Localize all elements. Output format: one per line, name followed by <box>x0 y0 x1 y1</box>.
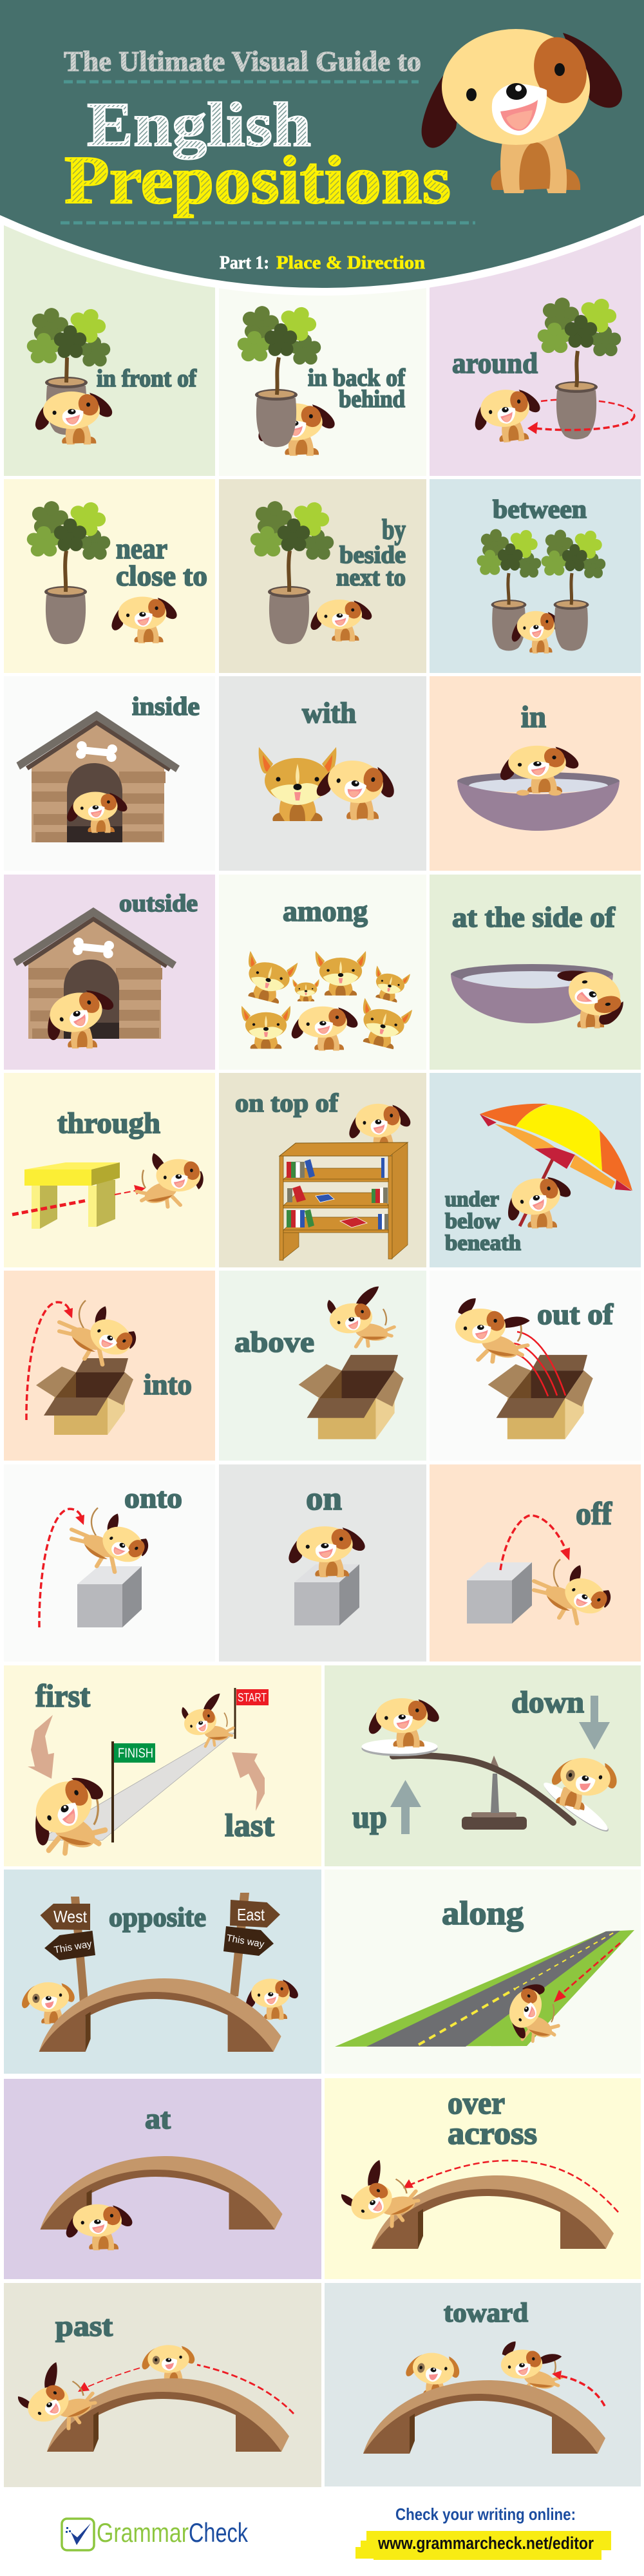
panel: with <box>219 676 426 871</box>
label: opposite: opposite <box>109 1903 206 1933</box>
label: up: up <box>352 1799 387 1835</box>
arrow: jump off cube <box>500 1515 570 1570</box>
icon: running dog <box>498 2334 565 2396</box>
label: outside: outside <box>119 890 198 917</box>
icon: dog leaping out <box>455 1294 531 1363</box>
label: between: between <box>493 495 587 524</box>
icon: dog going up <box>369 1698 439 1748</box>
icon: last dog <box>176 1688 236 1752</box>
panel: past <box>4 2283 321 2487</box>
label: above: above <box>234 1325 314 1358</box>
icon: bridge <box>363 2380 605 2454</box>
label: over: over <box>448 2085 505 2121</box>
icon: start flag: START <box>238 1691 267 1704</box>
label: close to: close to <box>116 560 207 592</box>
arrow: around tree <box>527 415 634 434</box>
panel: into <box>4 1271 215 1461</box>
icon: west signpost <box>40 1897 95 2003</box>
panel: in back of / behind <box>219 219 426 476</box>
arrow: through the table <box>12 1185 146 1215</box>
subtitle: part 1 <box>220 252 425 273</box>
icon: dog above box <box>321 1280 397 1352</box>
label: past: past <box>55 2309 113 2342</box>
panel: toward <box>325 2283 641 2486</box>
panel: at the side of <box>430 875 641 1070</box>
icon: dog going down <box>550 1752 621 1812</box>
icon: dog <box>316 753 400 820</box>
label: off: off <box>576 1495 612 1531</box>
icon: bowl <box>451 964 613 1023</box>
icon: sitting dog <box>404 2349 462 2396</box>
panel: around <box>430 219 641 476</box>
footer logo: GrammarCheck: Check <box>189 2517 249 2548</box>
icon: dog behind tree <box>258 403 335 456</box>
icon: group of puppies <box>240 951 412 1052</box>
icon: finish flag <box>113 1741 155 1842</box>
arrow: over the bridge <box>403 2161 618 2212</box>
icon: sitting dog <box>142 2345 194 2385</box>
footer call to action <box>355 2505 611 2560</box>
arrow: down to first <box>28 1715 54 1779</box>
label: in back of: in back of <box>308 365 406 392</box>
icon: bridge <box>47 2378 289 2452</box>
subtitle: part 1: Place & Direction <box>276 252 425 273</box>
label: inside: inside <box>132 692 200 721</box>
arrow: past the dog <box>78 2365 294 2414</box>
arrow: jump into box <box>26 1302 73 1420</box>
title: line 1: The Ultimate Visual Guide to <box>64 46 421 77</box>
icon: right tree <box>542 526 605 650</box>
icon: bridge <box>39 1978 281 2052</box>
icon: east signpost <box>223 1893 280 1996</box>
panel: above <box>219 1271 426 1461</box>
panel: near / close to <box>4 479 215 673</box>
icon: bridge <box>40 2156 282 2230</box>
icon: jumping dog <box>71 1508 152 1572</box>
icon: umbrella <box>480 1104 632 1226</box>
icon: motion lines <box>510 1332 565 1396</box>
panel: on top of <box>219 1073 426 1267</box>
panel: out of <box>430 1271 641 1461</box>
panel: through <box>4 1073 215 1267</box>
icon: dog inside doghouse <box>67 792 128 833</box>
icon: dog <box>310 600 372 641</box>
footer logo: GrammarCheck: Grammar <box>97 2517 189 2548</box>
icon: finish flag: FINISH <box>118 1746 153 1761</box>
label: at: at <box>145 2102 171 2135</box>
panel: under / below / beneath <box>430 1073 641 1267</box>
footer url: www.grammarcheck.net/editor <box>377 2533 594 2553</box>
icon: dog outside doghouse <box>37 983 119 1048</box>
subtitle: part 1: Part 1: <box>220 252 269 273</box>
arrow: up <box>390 1780 421 1834</box>
icon: dog between trees <box>512 611 563 654</box>
panel: over / across <box>325 2078 641 2279</box>
label: toward: toward <box>444 2298 528 2328</box>
icon: large dog mascot <box>422 29 622 193</box>
icon: doghouse <box>17 711 180 842</box>
label: in: in <box>521 700 546 734</box>
panel: in front of <box>4 219 215 476</box>
label: down: down <box>511 1685 584 1719</box>
label: beneath: beneath <box>445 1231 521 1255</box>
icon: dog <box>472 387 543 445</box>
label: among: among <box>283 895 368 927</box>
icon: potted tree <box>27 304 111 435</box>
panel: among <box>219 875 426 1070</box>
icon: dog walking along road <box>500 1975 558 2041</box>
panel: along <box>325 1870 641 2074</box>
icon: dog on shelf <box>349 1104 410 1151</box>
label: with: with <box>302 696 356 729</box>
icon: open box <box>36 1358 133 1435</box>
icon: dog on west side <box>22 1982 75 2024</box>
icon: road <box>335 1930 634 2047</box>
panel: off <box>430 1464 641 1662</box>
title: English: English <box>87 90 311 160</box>
label: under: under <box>445 1188 499 1211</box>
icon: first dog <box>21 1766 111 1854</box>
icon: left tree <box>477 526 541 650</box>
icon: cube <box>467 1562 532 1624</box>
footer logo: GrammarCheck <box>62 2517 249 2550</box>
label: beside: beside <box>339 542 406 569</box>
icon: bridge <box>372 2175 614 2249</box>
label: first: first <box>35 1678 90 1714</box>
icon: start flag <box>235 1688 269 1739</box>
icon: jumping dog <box>59 1300 140 1365</box>
icon: cube <box>77 1566 142 1627</box>
icon: balance scale <box>362 1739 612 1837</box>
icon: dog at bridge <box>66 2204 132 2250</box>
panel: outside <box>4 875 215 1070</box>
icon: bookshelf <box>279 1142 408 1260</box>
arrow: up to last <box>232 1752 265 1811</box>
label: at the side of: at the side of <box>452 902 616 933</box>
label: into: into <box>144 1368 192 1401</box>
title: Prepositions: Prepositions <box>64 142 451 218</box>
label: around: around <box>452 346 538 379</box>
label: onto: onto <box>124 1482 182 1514</box>
icon: potted tree <box>538 294 621 439</box>
icon: west signpost: This way <box>53 1938 93 1956</box>
arrow: jump onto cube <box>39 1509 84 1627</box>
label: along: along <box>442 1895 524 1932</box>
icon: east signpost: East <box>237 1905 265 1924</box>
label: on: on <box>306 1481 342 1517</box>
label: across: across <box>448 2115 537 2151</box>
label: by: by <box>382 514 406 545</box>
icon: running dog <box>330 2152 427 2240</box>
label: behind: behind <box>339 386 405 413</box>
icon: dog on east side <box>246 1978 298 2020</box>
icon: walking dog <box>137 1152 205 1208</box>
arrow: toward the dog <box>552 2371 605 2406</box>
label: out of: out of <box>537 1298 614 1331</box>
icon: potted tree <box>238 302 321 447</box>
icon: west signpost: West <box>53 1907 88 1926</box>
panel: first / last <box>4 1665 321 1866</box>
icon: racetrack <box>38 1733 234 1841</box>
label: below: below <box>445 1209 500 1233</box>
panel: onto <box>4 1464 215 1662</box>
icon: dog beside bowl <box>556 961 634 1030</box>
icon: dog in bowl <box>457 746 620 831</box>
panel: opposite <box>4 1870 321 2074</box>
label: through: through <box>57 1106 160 1139</box>
icon: dog in front of tree <box>35 392 112 444</box>
icon: potted tree <box>251 497 334 644</box>
icon: table <box>24 1162 120 1229</box>
icon: dog on cube <box>289 1526 365 1577</box>
icon: dog under umbrella <box>502 1172 574 1229</box>
icon: open box <box>299 1355 404 1439</box>
icon: open box <box>488 1355 593 1439</box>
panel: between <box>430 479 641 673</box>
panel: at <box>4 2079 321 2279</box>
header banner <box>0 0 644 288</box>
label: in front of: in front of <box>97 365 197 392</box>
label: near: near <box>116 532 167 565</box>
panel: up / down <box>325 1665 641 1866</box>
arrow: down <box>579 1696 610 1750</box>
icon: running dog <box>6 2354 104 2443</box>
label: on top of: on top of <box>235 1088 339 1117</box>
icon: jumping dog <box>534 1559 614 1624</box>
panel: inside <box>4 676 215 871</box>
icon: dog <box>111 597 177 643</box>
icon: east signpost: This way <box>225 1933 265 1950</box>
label: next to: next to <box>336 564 406 591</box>
label: last: last <box>225 1807 274 1843</box>
panel: in <box>430 676 641 871</box>
icon: potted tree <box>27 497 111 644</box>
footer call to action: Check your writing online: <box>395 2505 576 2524</box>
icon: doghouse <box>13 907 176 1039</box>
panel: on <box>219 1464 426 1662</box>
arrow: along the road <box>554 1943 620 2002</box>
icon: fox-eared puppy <box>259 747 336 821</box>
panel: by / beside / next to <box>219 479 426 673</box>
icon: cube <box>294 1564 359 1625</box>
